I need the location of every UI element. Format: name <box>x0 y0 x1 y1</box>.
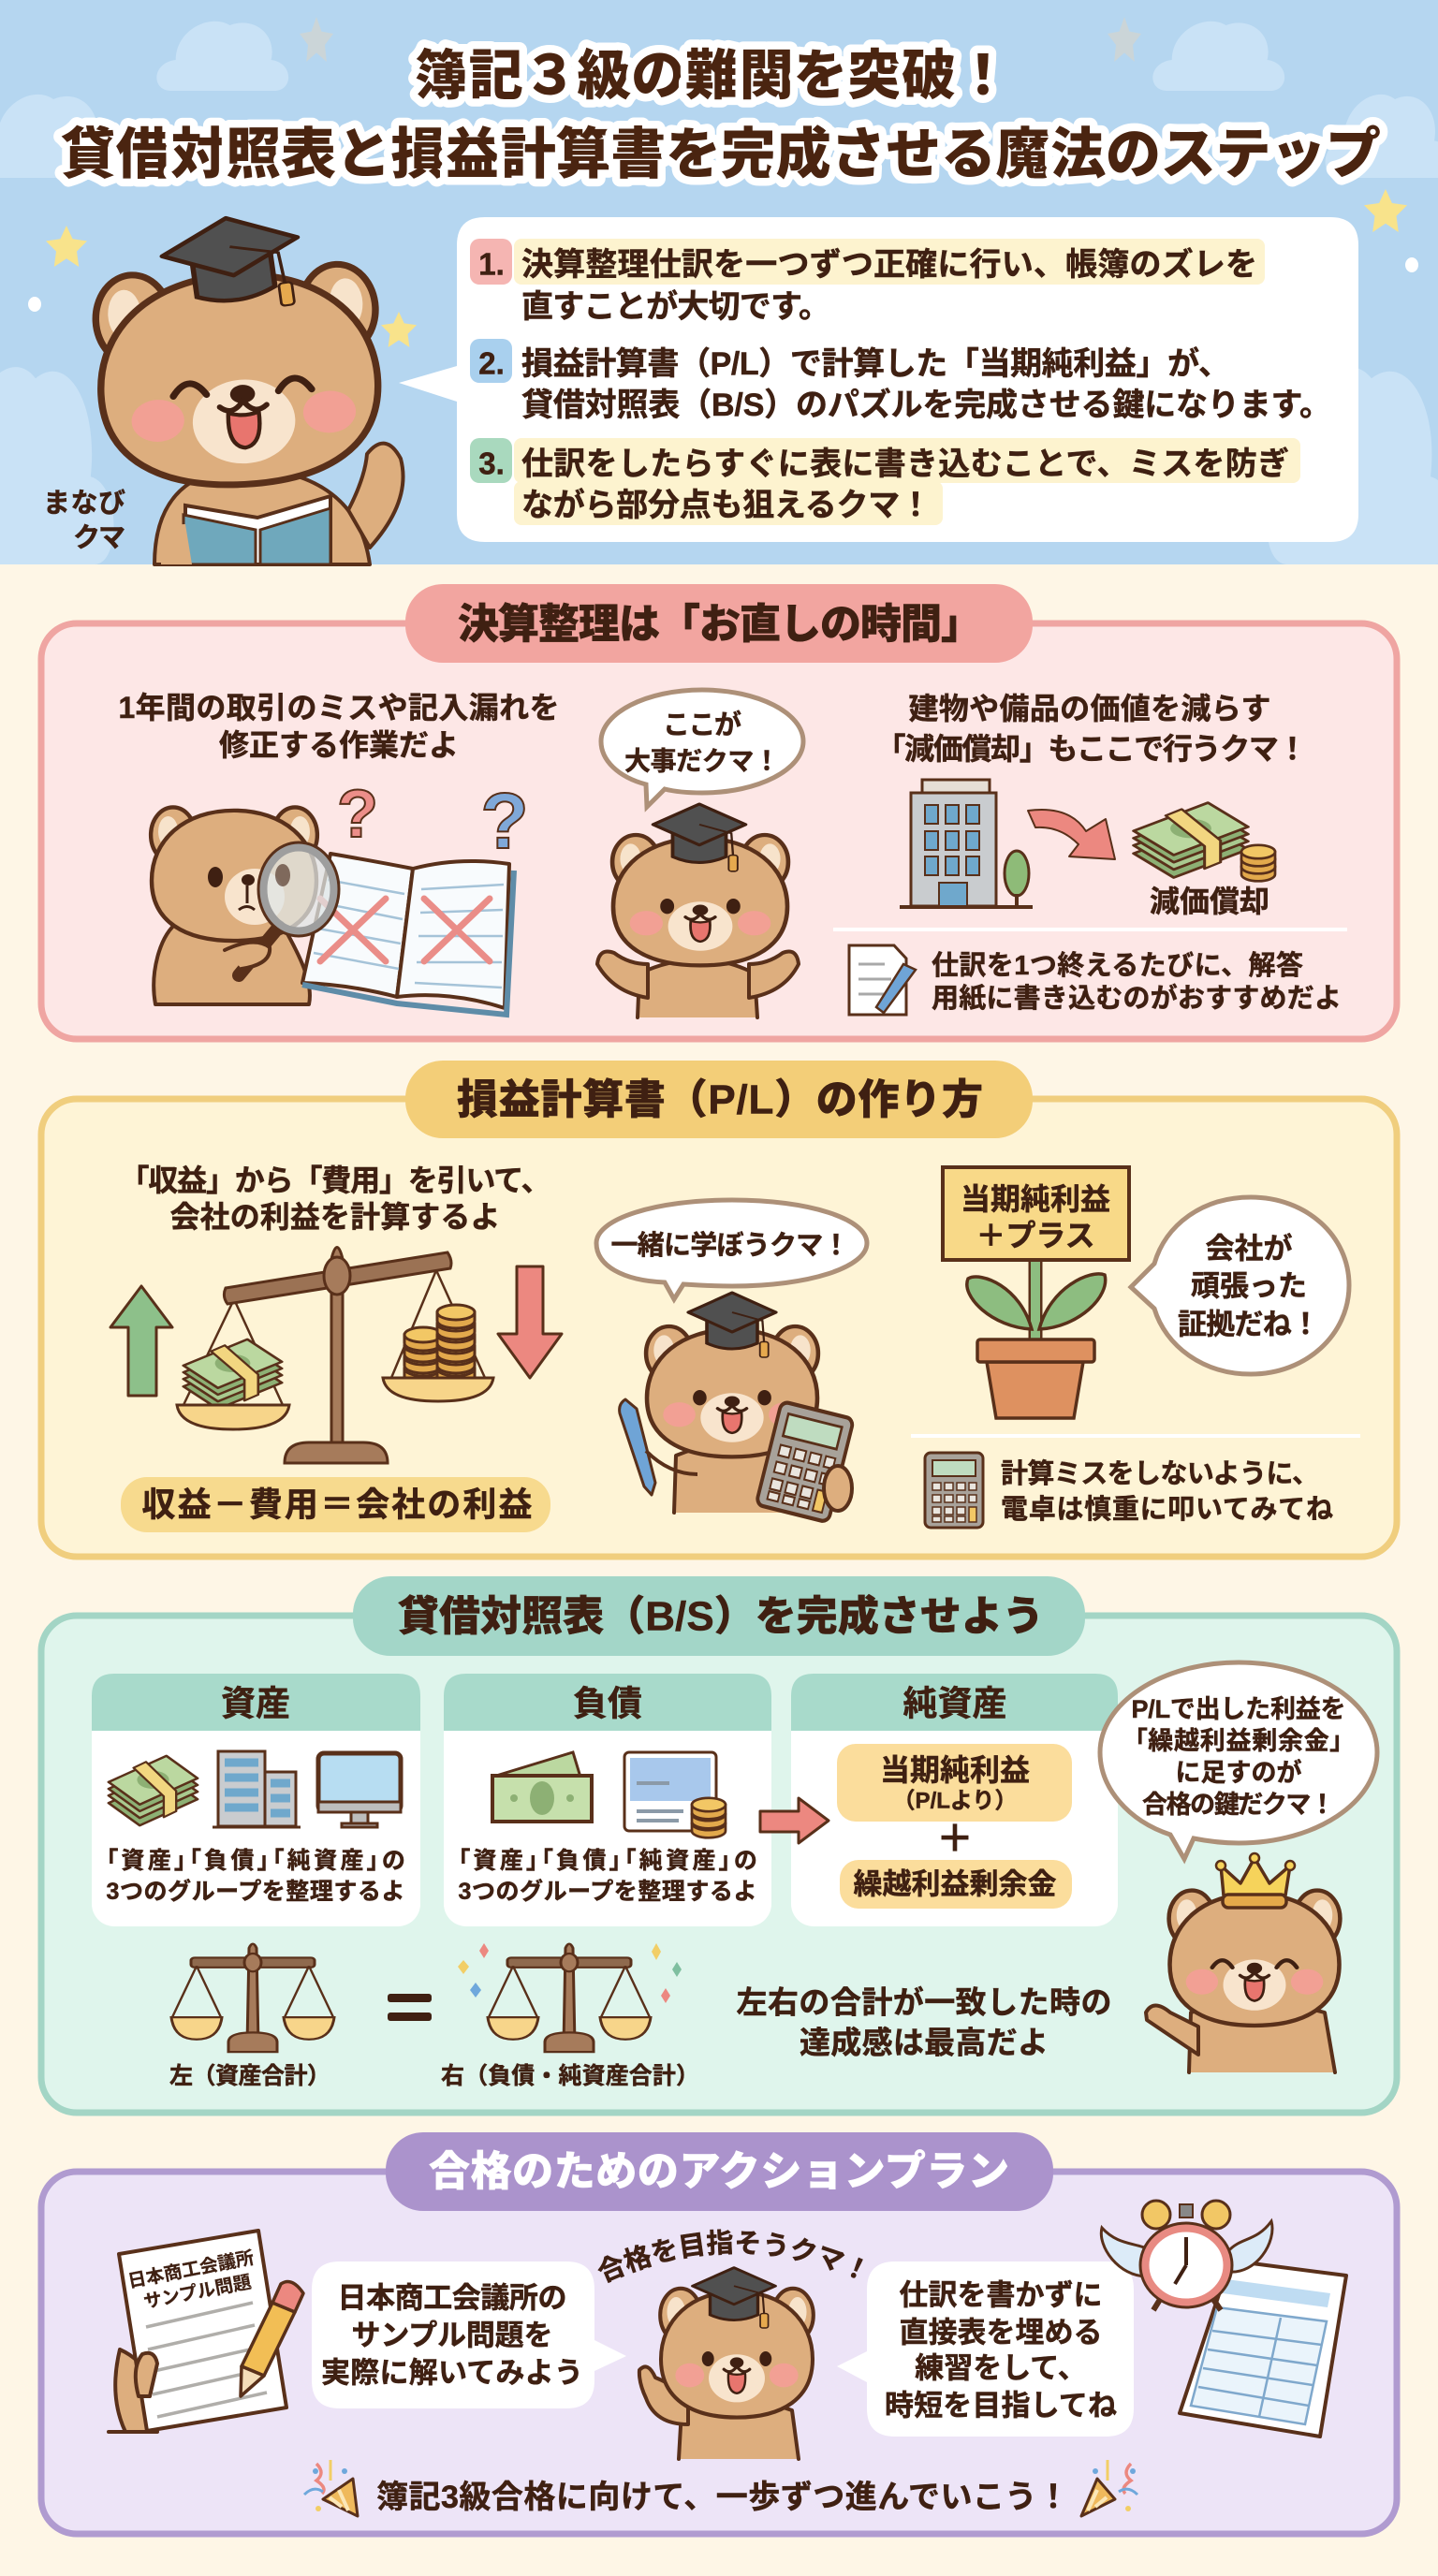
labels: totals <box>169 2063 699 2089</box>
header band <box>0 0 1438 564</box>
text: sense of achievement: 左右の合計が一致した時の <box>736 1984 1112 2020</box>
mascot name: クマ <box>73 523 125 553</box>
speech bubble: learn together: 一緒に学ぼうクマ！ <box>610 1230 850 1261</box>
speech bubble: key to passing: に足すのが <box>1176 1758 1301 1787</box>
sign: net income: ＋プラス <box>976 1219 1095 1252</box>
speech bubble: solve sample problems <box>312 2261 626 2408</box>
arrow: up <box>110 1286 172 1396</box>
card: net assets: 純資産 <box>902 1685 1007 1722</box>
icon: credit card and coins <box>624 1752 726 1837</box>
heading: action plan <box>386 2132 1053 2211</box>
illustration: bear with crown <box>1146 1853 1340 2072</box>
speech bubble: skip journal entries: 時短を目指してね <box>885 2389 1117 2422</box>
speech bubble: important: ここが <box>663 709 741 740</box>
icon: bills <box>492 1752 592 1822</box>
speech bubble: skip journal entries: 仕訳を書かずに <box>899 2278 1103 2312</box>
text: calculator tip: 計算ミスをしないように、 <box>1001 1458 1319 1489</box>
speech bubble: important: 大事だクマ！ <box>624 747 780 775</box>
arrow: to net assets <box>760 1798 829 1843</box>
card: liabilities: 3つのグループを整理するよ <box>459 1878 756 1905</box>
speech bubble: proof of effort: 頑張った <box>1191 1269 1307 1303</box>
arc text: aim to pass: 合格を目指そうクマ！ <box>597 2229 863 2284</box>
illustration: bear pointing up <box>639 2268 814 2459</box>
speech bubble: key to passing: 合格の鍵だクマ！ <box>1142 1791 1335 1819</box>
text: fix mistakes: 修正する作業だよ <box>219 728 459 762</box>
card: liabilities <box>444 1674 771 1926</box>
point 1: 決算整理仕訳を一つずつ正確に行い、帳簿のズレを <box>521 246 1257 283</box>
illustration: bear with magnifier and ledger: ? <box>337 777 378 852</box>
yellow highlights <box>514 239 1300 525</box>
point 2 <box>470 339 1331 423</box>
heading: B/S: 貸借対照表（B/S）を完成させよう <box>398 1593 1044 1640</box>
card: net assets: （P/Lより） <box>893 1788 1017 1814</box>
speech bubble: proof of effort: 証拠だね！ <box>1178 1309 1320 1340</box>
formula: 収益－費用＝会社の利益 <box>142 1485 532 1524</box>
icon: right party popper <box>1081 2460 1137 2516</box>
heading: P/L <box>405 1061 1033 1138</box>
illustration: bear with magnifier and ledger <box>151 777 529 1015</box>
arrow: value decreases <box>1028 810 1115 859</box>
text: revenue minus expenses <box>120 1164 550 1234</box>
card: liabilities: 「資産」「負債」「純資産」の <box>459 1848 756 1874</box>
text: depreciation <box>876 692 1307 766</box>
speech bubble: key to passing <box>1100 1662 1377 1859</box>
sign: net income: 当期純利益 <box>961 1182 1110 1216</box>
point 3: 3. <box>478 446 505 481</box>
card: net assets <box>791 1674 1118 1926</box>
card: liabilities: 負債 <box>573 1685 642 1722</box>
card: assets: 資産 <box>221 1685 290 1722</box>
illustration: bear with magnifier and ledger: ? <box>480 777 529 865</box>
card: assets: 「資産」「負債」「純資産」の <box>107 1848 404 1874</box>
panel: profit and loss <box>41 1061 1397 1557</box>
speech bubble: learn together <box>596 1200 867 1299</box>
text: depreciation: 「減価償却」もここで行うクマ！ <box>876 732 1307 766</box>
mascot name <box>43 488 125 553</box>
point 1: 直すことが大切です。 <box>521 288 830 325</box>
speech bubble: skip journal entries: 直接表を埋める <box>899 2316 1103 2349</box>
card: net assets: ＋ <box>936 1819 974 1860</box>
illustration: sample exam paper: サンプル問題 <box>142 2272 254 2313</box>
panel: closing adjustments <box>41 584 1397 1039</box>
speech bubble: solve sample problems: 実際に解いてみよう <box>321 2357 583 2389</box>
card: assets: 3つのグループを整理するよ <box>107 1878 404 1905</box>
title: 貸借対照表と損益計算書を完成させる魔法のステップ <box>61 124 1381 185</box>
text: sense of achievement <box>736 1984 1112 2059</box>
mascot: manabi kuma with book <box>94 209 404 564</box>
illustration: sample exam paper <box>109 2231 303 2432</box>
equals sign <box>388 1994 432 2021</box>
icon: money and coins <box>1134 803 1275 881</box>
title: 簿記３級の難関を突破！ <box>415 45 1010 107</box>
speech bubble: proof of effort: 会社が <box>1206 1232 1292 1266</box>
point 1 <box>470 239 1257 325</box>
card: net assets: 当期純利益 <box>880 1753 1030 1787</box>
chart: balance scale <box>177 1247 493 1463</box>
text: tip <box>932 950 1342 1014</box>
speech bubble: key to passing: P/Lで出した利益を <box>1131 1695 1346 1723</box>
text: calculator tip: 電卓は慎重に叩いてみてね <box>1001 1494 1333 1525</box>
heading: B/S <box>353 1576 1085 1656</box>
closing message <box>304 2460 1137 2516</box>
title <box>61 45 1381 185</box>
icon: document and pen <box>849 945 916 1015</box>
icon: left party popper <box>304 2460 358 2516</box>
label: depreciation: 減価償却 <box>1150 885 1269 918</box>
text: tip: 用紙に書き込むのがおすすめだよ <box>932 982 1342 1014</box>
sign: net income <box>943 1167 1129 1260</box>
point 3: ながら部分点も狙えるクマ！ <box>521 487 932 523</box>
text: depreciation: 建物や備品の価値を減らす <box>908 692 1271 725</box>
speech bubble: solve sample problems: 日本商工会議所の <box>337 2282 567 2314</box>
arrow: down <box>498 1266 562 1378</box>
speech bubble: skip journal entries: 練習をして、 <box>915 2351 1087 2385</box>
text: sense of achievement: 達成感は最高だよ <box>800 2026 1049 2059</box>
icon: building <box>900 780 1033 907</box>
illustration: sample exam paper: 日本商工会議所 <box>126 2247 256 2292</box>
illustration: bear with cap, arms raised <box>597 804 799 1017</box>
speech bubble: key to passing: 「繰越利益剰余金」 <box>1135 1727 1343 1755</box>
point 3: 仕訳をしたらすぐに表に書き込むことで、ミスを防ぎ <box>521 446 1289 482</box>
text: fix mistakes <box>118 691 560 762</box>
illustration: profit plant <box>943 1167 1129 1418</box>
speech panel: three key points <box>399 217 1358 542</box>
point 1: 1. <box>478 247 505 281</box>
text: revenue minus expenses: 「収益」から「費用」を引いて、 <box>120 1164 550 1197</box>
speech bubble: solve sample problems: サンプル問題を <box>352 2320 552 2351</box>
icon: right balance <box>488 1944 651 2052</box>
confetti <box>458 1943 682 2003</box>
heading: closing adjustments: 決算整理は「お直しの時間」 <box>458 601 982 648</box>
panel: balance sheet <box>41 1576 1397 2113</box>
text: tip: 仕訳を1つ終えるたびに、解答 <box>932 950 1303 981</box>
text: revenue minus expenses: 会社の利益を計算するよ <box>170 1200 500 1234</box>
heading: closing adjustments <box>405 584 1033 663</box>
icon: calculator <box>925 1453 983 1528</box>
labels: totals: 右（負債・純資産合計） <box>441 2063 699 2089</box>
icon: crown <box>1216 1853 1295 1908</box>
speech bubble: proof of effort <box>1131 1197 1349 1374</box>
card: assets <box>92 1674 420 1926</box>
illustration: worksheet table <box>1180 2261 1346 2437</box>
card: net assets: 繰越利益剰余金 <box>854 1868 1056 1900</box>
mascot name: まなび <box>43 488 125 519</box>
illustration: winged alarm clock <box>1101 2201 1272 2310</box>
icon: office <box>213 1751 301 1827</box>
point 2: 2. <box>478 346 505 380</box>
heading: action plan: 合格のためのアクションプラン <box>429 2149 1009 2194</box>
illustration: bear with pen and calculator <box>620 1293 854 1522</box>
panel: action plan <box>37 2132 1401 2537</box>
point 2: 損益計算書（P/L）で計算した「当期純利益」が、 <box>521 345 1230 382</box>
heading: P/L: 損益計算書（P/L）の作り方 <box>457 1076 983 1123</box>
point 3 <box>470 438 1289 523</box>
text: fix mistakes: 1年間の取引のミスや記入漏れを <box>118 691 560 724</box>
speech bubble: skip journal entries <box>837 2261 1134 2437</box>
closing message: 簿記3級合格に向けて、一歩ずつ進んでいこう！ <box>376 2480 1069 2515</box>
icon: monitor <box>318 1753 401 1827</box>
formula <box>121 1477 550 1532</box>
speech bubble: important <box>601 690 803 807</box>
text: calculator tip <box>1001 1458 1333 1525</box>
labels: totals: 左（資産合計） <box>169 2063 330 2089</box>
icon: left balance <box>171 1944 334 2052</box>
point 2: 貸借対照表（B/S）のパズルを完成させる鍵になります。 <box>521 387 1331 423</box>
